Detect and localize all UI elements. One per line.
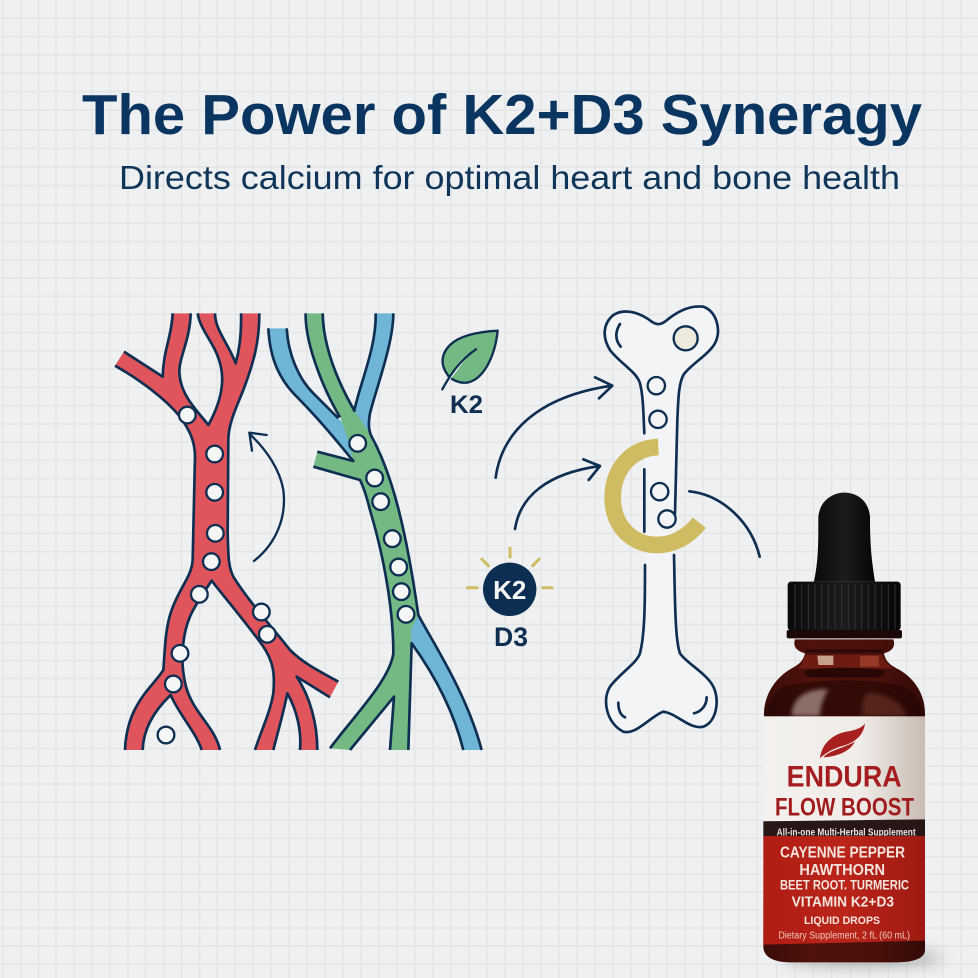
arrows pointing to bone: [496, 377, 760, 557]
red label panel: [763, 836, 925, 945]
glass bottle body: [763, 639, 925, 962]
strip text: All-in-one Multi-Herbal Supplement: [777, 827, 916, 838]
product name FLOW BOOST: FLOW BOOST: [775, 794, 914, 822]
white label: [763, 716, 925, 821]
ingredients list: LIQUID DROPS: [804, 915, 880, 927]
calcium particles in vessel: [349, 435, 414, 623]
red vessel outline: [115, 313, 338, 750]
arrow: curved upward arrow beside artery: [249, 433, 284, 561]
panel: green and blue vessels with calcium particles: [268, 313, 482, 750]
green vessel fill: [306, 313, 418, 750]
ingredients list: [780, 845, 909, 927]
green and blue vessel outlines: [268, 313, 482, 750]
label: D3: D3: [494, 622, 528, 652]
label logo: [820, 723, 865, 758]
dropper bulb: [814, 493, 875, 582]
bottle shadow: [783, 951, 943, 966]
calcium particles in artery: [158, 407, 276, 743]
supplement facts line: Dietary Supplement, 2 fL (60 mL): [778, 930, 910, 941]
ingredients list: HAWTHORN: [799, 862, 885, 879]
dropper collar: [787, 582, 902, 638]
panel: bone with gold ring and arrows: [496, 306, 760, 732]
ingredients list: BEET ROOT. TURMERIC: [780, 876, 909, 892]
icon: K2 sun badge: [466, 547, 553, 616]
label: K2: K2: [450, 391, 483, 419]
icon: K2 sun badge: K2: [493, 575, 526, 605]
brand name ENDURA: ENDURA: [787, 761, 902, 794]
bone outline: [605, 306, 718, 732]
ingredients list: CAYENNE PEPPER: [780, 845, 905, 862]
title: The Power of K2+D3 Syneragy: [82, 83, 922, 147]
bone body: [605, 306, 718, 732]
red vessel fill: [115, 313, 338, 750]
panel: red artery tree with calcium particles: [115, 313, 338, 750]
ingredients list: VITAMIN K2+D3: [792, 895, 894, 911]
blue vessel fills: [268, 313, 482, 750]
icon: K2 leaf: [442, 331, 498, 389]
gold ring: [613, 447, 699, 545]
subtitle: Directs calcium for optimal heart and bone health: [119, 160, 900, 197]
bone holes and particles: [648, 326, 698, 528]
glass highlights: [764, 649, 925, 716]
black strip: [763, 819, 925, 837]
panel: Endura Flow Boost bottle: [763, 493, 943, 966]
